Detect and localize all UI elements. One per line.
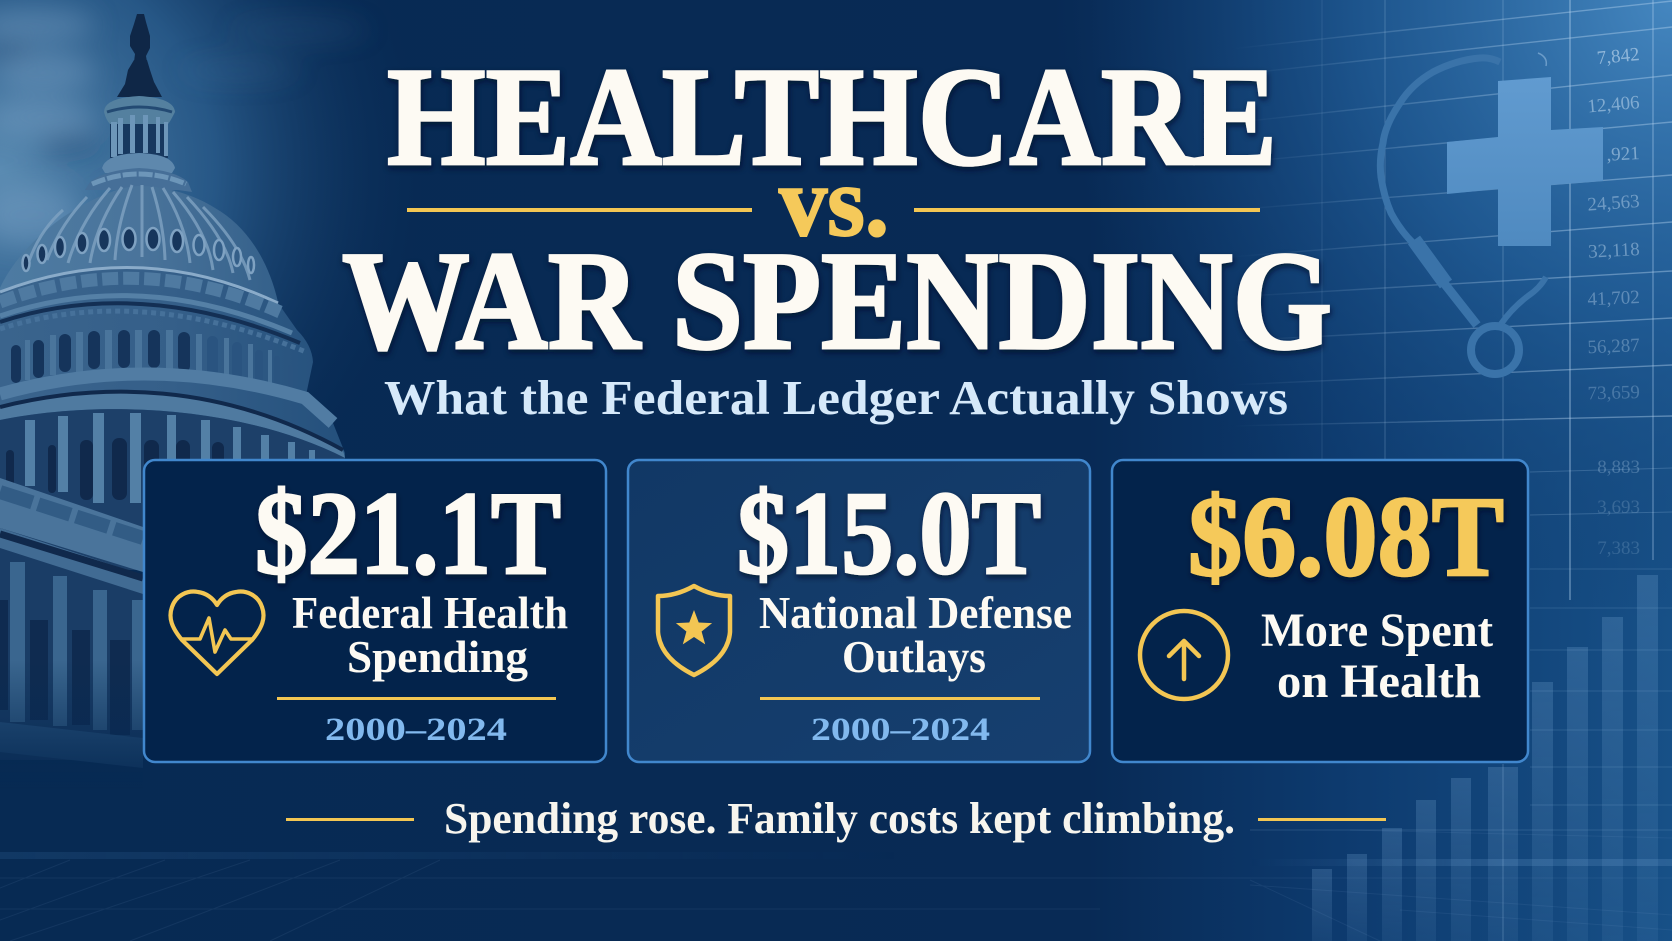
ledger numbers: 12,406	[1587, 92, 1640, 118]
stat: 21.1T: $21.1T	[255, 467, 561, 599]
divider line left	[407, 208, 752, 212]
ledger numbers: 24,563	[1587, 191, 1640, 216]
panel: federal health spending	[144, 460, 606, 762]
ledger numbers	[1587, 44, 1640, 559]
rising bar chart background	[1312, 575, 1658, 941]
footer line left	[286, 818, 414, 821]
capitol ring band	[0, 392, 345, 458]
label: federal health spending	[292, 587, 568, 682]
icon: shield with star	[658, 586, 730, 675]
panel: more spent on health	[1112, 460, 1528, 762]
ledger grid background	[1230, 0, 1672, 941]
illustration: capitol building	[0, 14, 345, 852]
ledger numbers: 56,287	[1587, 335, 1640, 358]
capitol drum pilasters	[25, 330, 272, 390]
ledger numbers: ,921	[1606, 143, 1640, 166]
label: federal health spending: Spending	[347, 631, 528, 682]
ledger numbers: 41,702	[1587, 287, 1640, 310]
footer tagline: Spending rose. Family costs kept climbing.	[444, 794, 1235, 843]
ground plane with perspective lines	[0, 830, 1672, 941]
ledger numbers: 32,118	[1588, 239, 1640, 263]
icon: stethoscope	[1380, 53, 1546, 374]
date range: 2000–2024	[325, 712, 507, 748]
label: national defense outlays: Outlays	[842, 631, 986, 682]
label: national defense outlays: National Defense	[759, 587, 1072, 638]
capitol lantern	[85, 96, 192, 192]
label: more spent on health	[1261, 604, 1493, 708]
capitol drum windows	[11, 330, 293, 395]
capitol colonnade arches	[6, 438, 224, 500]
date range: 2000–2024	[811, 712, 990, 748]
capitol drum	[0, 267, 345, 470]
ledger numbers: 7,383	[1597, 538, 1640, 559]
stat: 6.08T: $6.08T	[1188, 473, 1504, 600]
icon: heart with pulse	[170, 592, 264, 674]
icon: medical cross	[1447, 77, 1603, 246]
divider line right	[914, 208, 1260, 212]
capitol dome	[0, 186, 278, 312]
title: healthcare: HEALTHCARE	[387, 39, 1277, 195]
footer line right	[1258, 818, 1386, 821]
title: war spending: WAR SPENDING	[342, 223, 1332, 379]
capitol dome oval windows	[22, 228, 254, 273]
capitol lower columns	[10, 562, 143, 730]
stat: 15.0T: $15.0T	[737, 467, 1041, 599]
ledger numbers: 3,693	[1597, 497, 1640, 518]
capitol balustrade	[0, 374, 333, 423]
capitol colonnade	[0, 409, 345, 570]
label: national defense outlays	[759, 587, 1072, 682]
capitol statue and cap	[117, 14, 162, 97]
title: vs.: vs.	[779, 146, 889, 257]
ledger numbers: 8,883	[1597, 457, 1640, 478]
capitol wing balustrade	[0, 478, 143, 572]
icon: up arrow in circle	[1140, 611, 1228, 699]
subtitle: What the Federal Ledger Actually Shows	[384, 370, 1288, 425]
ledger numbers: 7,842	[1596, 44, 1640, 69]
capitol lower colonnade	[0, 548, 143, 760]
label: more spent on health: on Health	[1277, 655, 1481, 708]
label: more spent on health: More Spent	[1261, 604, 1493, 657]
ledger numbers: 73,659	[1587, 382, 1640, 404]
capitol lower recesses	[0, 600, 130, 735]
capitol plinth	[0, 722, 143, 768]
panel: national defense outlays	[628, 460, 1090, 762]
label: federal health spending: Federal Health	[292, 587, 568, 638]
capitol colonnade columns	[25, 413, 315, 503]
